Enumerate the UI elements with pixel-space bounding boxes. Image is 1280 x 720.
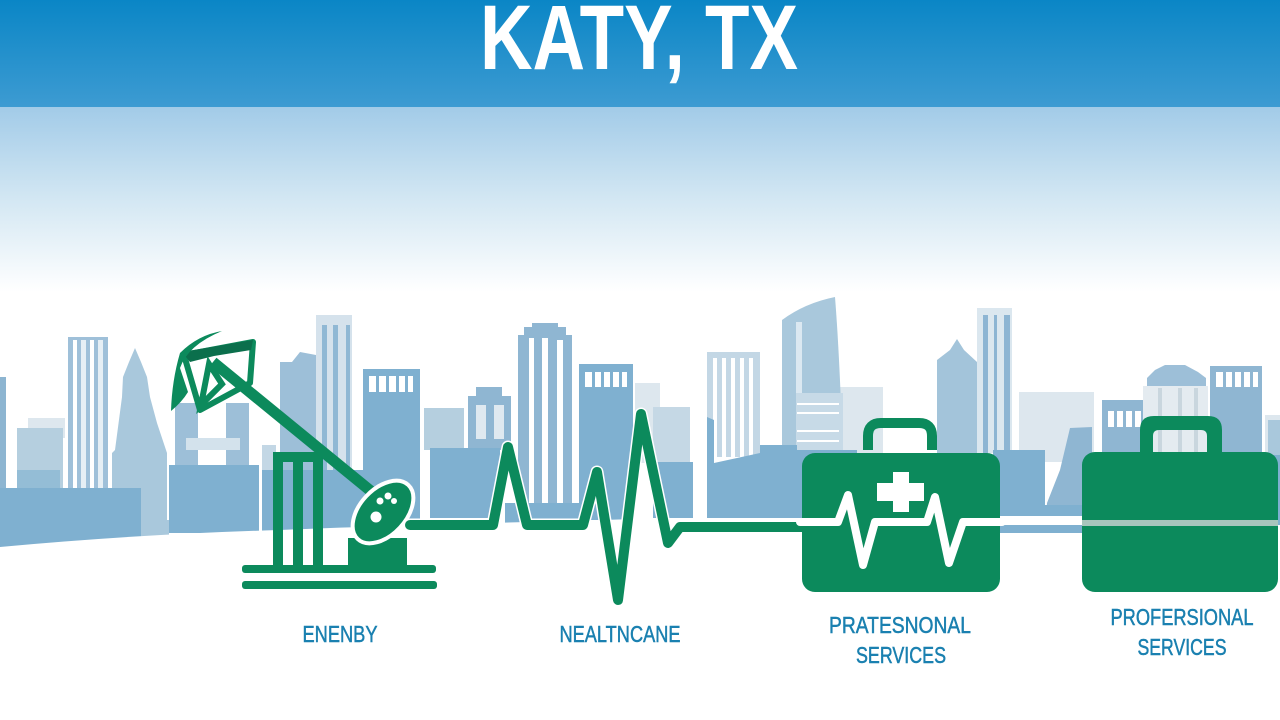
connector band [1000,516,1084,525]
striped tower one [68,337,108,489]
curved glass tower [782,297,843,463]
label: professional services one: SERVICES [856,642,946,668]
kit body [802,453,1000,592]
pump base rails [242,565,437,589]
window tower centre [579,364,633,520]
city skyline [0,297,1280,550]
briefcase body [1082,452,1278,592]
spire tower [112,348,167,530]
temple top building [424,387,511,450]
far right window tower [1210,366,1280,460]
label: professional services two [1110,604,1254,660]
foreground blue blocks [0,417,1280,550]
dome building [1143,365,1208,456]
pump horse head [171,331,253,411]
slanted building [1046,427,1092,517]
right striped tower [977,308,1012,453]
right spire tower [937,339,977,455]
twin towers behind pump [175,352,316,475]
window block tower [363,369,420,519]
pale striped tower [707,352,760,457]
heartbeat line [410,414,802,600]
label: professional services two: SERVICES [1138,634,1226,660]
column tower [518,323,572,505]
briefcase seam [1082,520,1278,526]
label: professional services one: PRATESNONAL [829,612,971,638]
white foreground ground [0,519,1280,720]
pump gear block [348,538,407,566]
header banner [0,0,1280,107]
pale background buildings [28,383,1280,465]
label: healthcare: NEALTNCANE [560,621,680,647]
icon: oil pump jack [171,331,437,589]
pump beam [213,362,372,492]
briefcase handle [1140,416,1222,456]
light bar detail [186,438,240,450]
icon: briefcase [1082,416,1278,592]
kit handle [868,423,932,450]
pump counterweight [341,469,425,555]
kit cross [877,472,924,512]
striped tower two [316,315,352,480]
left edge buildings [0,377,63,492]
label: professional services one [829,612,971,668]
kit heartbeat [800,495,1002,565]
faded building [653,407,690,463]
sky gradient background [0,107,1280,292]
icon: medical kit [800,423,1002,592]
pump frame [273,452,323,566]
label: energy: ENENBY [302,621,378,647]
window block right [1102,400,1143,460]
